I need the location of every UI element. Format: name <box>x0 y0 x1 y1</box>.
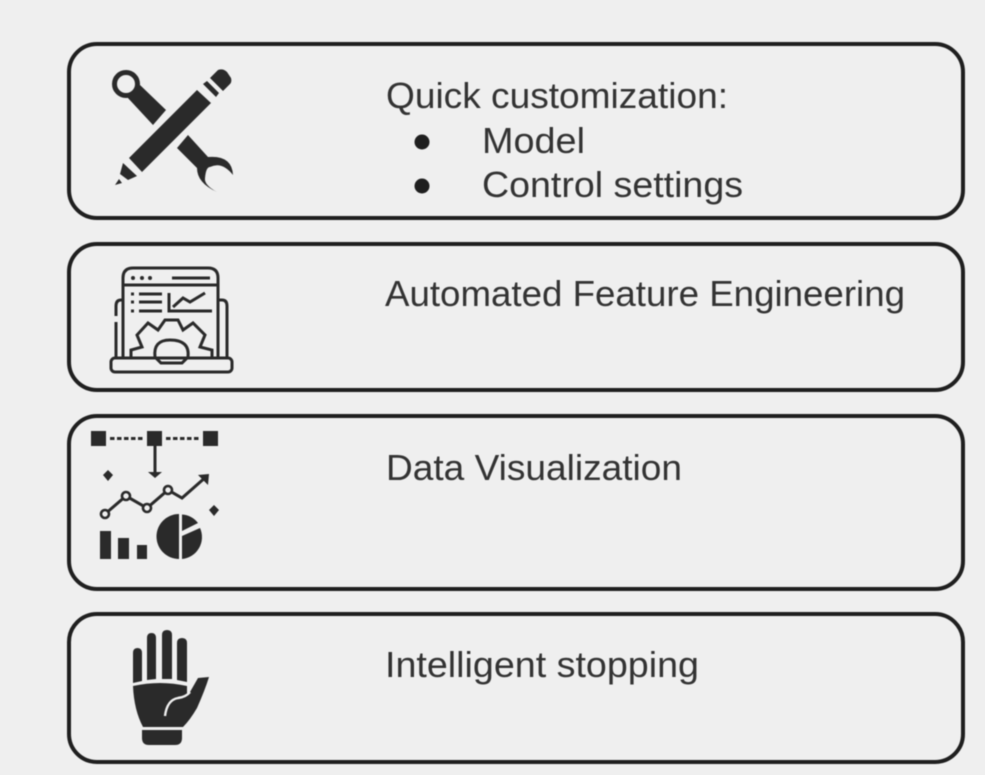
panel: data visualization <box>69 416 963 589</box>
panel: intelligent stopping <box>69 614 963 762</box>
panel: automated feature engineering <box>69 244 963 390</box>
icon: raised hand <box>133 630 209 745</box>
heading: quick customization: Quick customization: <box>386 75 728 116</box>
text: automated feature engineering: Automated Feature Engineering <box>385 273 905 314</box>
icon: data charts <box>91 431 219 559</box>
bullet: model: Model <box>482 120 585 161</box>
text: data visualization: Data Visualization <box>386 447 682 488</box>
bullet: control settings: Control settings <box>482 164 743 205</box>
bullet: model <box>414 120 585 161</box>
text: intelligent stopping: Intelligent stopping <box>385 644 699 685</box>
icon: crossed wrench and pencil <box>114 69 233 192</box>
icon: laptop with gear and charts <box>111 268 232 372</box>
panel: quick customization <box>69 44 963 218</box>
